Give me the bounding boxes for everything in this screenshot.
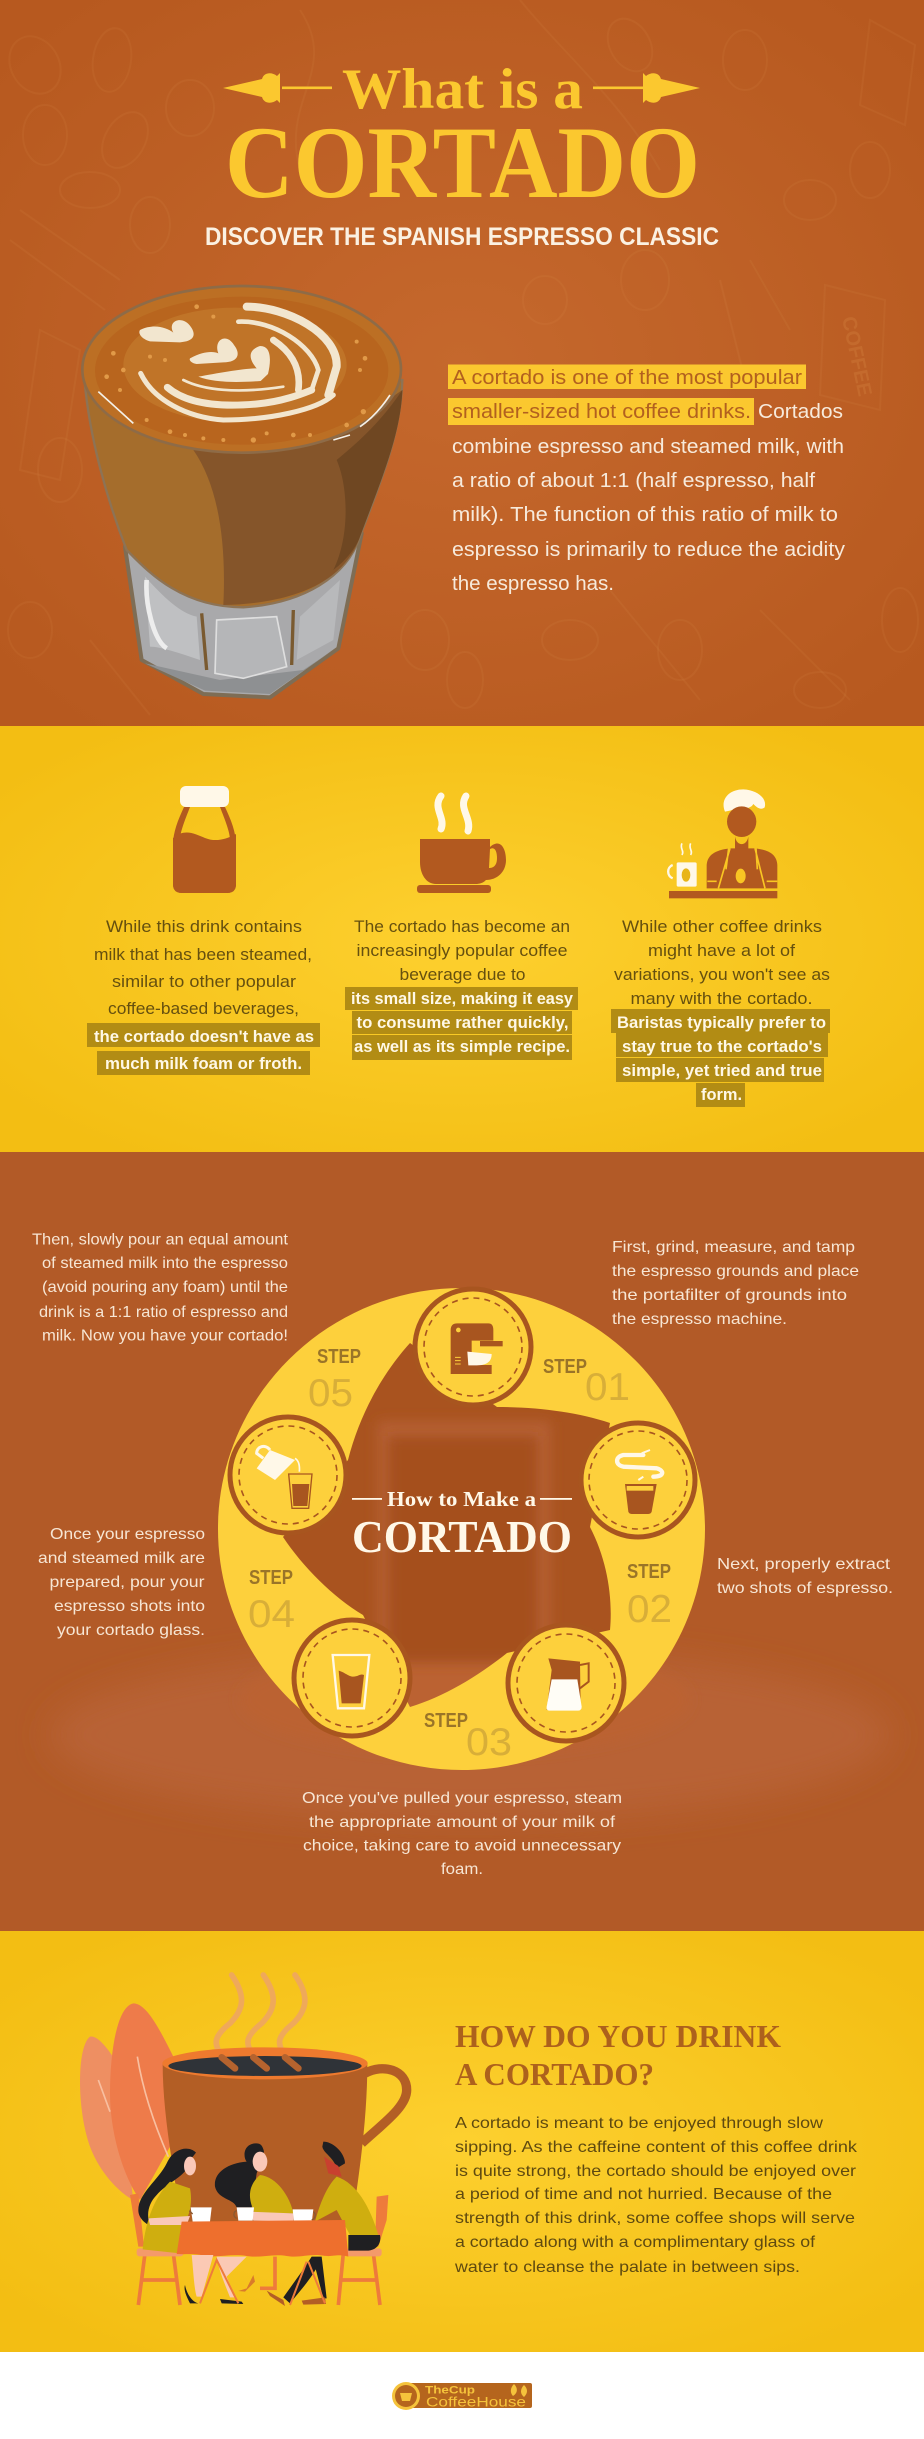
text: step 3: choice, taking care to avoid unnecessary <box>303 1838 621 1854</box>
text: column 1: coffee-based beverages, <box>108 999 299 1018</box>
blurred photo backdrop <box>50 1305 890 1820</box>
heading <box>455 2018 781 2092</box>
step labels: STEP <box>543 1356 587 1378</box>
body text: A cortado is meant to be enjoyed through slow <box>455 2115 823 2132</box>
text: step 5: of steamed milk into the espresso <box>42 1255 288 1272</box>
step labels <box>248 1346 672 1764</box>
panel: how to make <box>0 1152 924 1931</box>
panel: how do you drink <box>0 1931 924 2352</box>
intro text: A cortado is one of the most popular <box>452 367 802 389</box>
step labels: 03 <box>466 1721 512 1764</box>
text: column 2: beverage due to <box>400 965 526 984</box>
text: step 3: the appropriate amount of your milk of <box>309 1814 616 1831</box>
logo: CoffeeHouse <box>426 2394 526 2410</box>
left woman <box>138 2149 196 2253</box>
intro text: smaller-sized hot coffee drinks. <box>452 401 751 423</box>
text: step 2: Next, properly extract <box>717 1556 891 1573</box>
text: step 3 <box>302 1790 622 1878</box>
body text: strength of this drink, some coffee shops will serve <box>455 2210 855 2227</box>
text: column 3: While other coffee drinks <box>622 917 822 936</box>
node 5: pouring milk <box>230 1417 346 1533</box>
text: column 1: similar to other popular <box>112 972 296 991</box>
text: step 4: Once your espresso <box>50 1526 205 1543</box>
body text: a period of time and not hurried. Because of the <box>455 2186 832 2203</box>
step labels: STEP <box>249 1567 293 1589</box>
text: step 5: drink is a 1:1 ratio of espresso and <box>39 1304 288 1321</box>
subtitle: DISCOVER THE SPANISH ESPRESSO CLASSIC <box>205 223 719 251</box>
illustration: cortado glass <box>82 286 402 697</box>
wheel: five-step ring <box>218 1288 705 1770</box>
intro text: milk). The function of this ratio of milk to <box>452 504 838 526</box>
footer panel <box>0 2352 924 2439</box>
text: step 4: espresso shots into <box>54 1598 205 1615</box>
body text <box>454 2115 858 2276</box>
step labels: 02 <box>627 1588 672 1631</box>
logo: TheCup <box>425 2384 475 2396</box>
text: column 3 <box>611 917 830 1107</box>
text: step 4 <box>38 1526 205 1639</box>
text: column 2: as well as its simple recipe. <box>354 1037 570 1056</box>
panel: intro <box>0 0 924 726</box>
text: column 3: form. <box>701 1085 742 1104</box>
text: step 2 <box>717 1556 893 1597</box>
text: column 1: the cortado doesn't have as <box>94 1027 314 1046</box>
step labels: STEP <box>424 1710 468 1732</box>
text: step 5: (avoid pouring any foam) until the <box>42 1279 288 1296</box>
text: column 2: The cortado has become an <box>354 917 570 936</box>
wheel heading: How to Make a <box>387 1487 537 1511</box>
node 4: cortado glass <box>294 1620 410 1736</box>
title ornament: right <box>593 73 700 103</box>
title: What is a: What is a <box>342 58 583 121</box>
text: column 2: its small size, making it easy <box>351 989 574 1008</box>
text: step 3: foam. <box>441 1861 483 1878</box>
text: column 2 <box>345 917 578 1060</box>
text: column 3: Baristas typically prefer to <box>617 1013 826 1032</box>
text: column 2: increasingly popular coffee <box>356 941 568 960</box>
text: step 1 <box>612 1239 859 1328</box>
wheel heading: CORTADO <box>352 1511 572 1562</box>
node 1: espresso machine <box>415 1289 531 1405</box>
intro text: Cortados <box>758 401 843 423</box>
text: column 3: variations, you won't see as <box>614 965 830 984</box>
middle woman <box>215 2143 293 2222</box>
text: step 3: Once you've pulled your espresso, steam <box>302 1790 622 1807</box>
man <box>315 2142 380 2251</box>
intro text: the espresso has. <box>452 573 614 595</box>
illustration: friends at giant cup <box>80 1975 407 2306</box>
text: step 2: two shots of espresso. <box>717 1580 893 1597</box>
text: step 5: milk. Now you have your cortado! <box>42 1328 288 1344</box>
title ornament: left <box>223 73 332 103</box>
panel: why a cortado <box>0 726 924 1152</box>
intro text: combine espresso and steamed milk, with <box>452 436 844 458</box>
step labels: 04 <box>248 1593 295 1636</box>
intro text <box>448 364 845 595</box>
text: column 1: While this drink contains <box>106 917 302 936</box>
icon: milk bottle <box>173 786 236 893</box>
icon: steaming cup <box>417 796 506 893</box>
step labels: STEP <box>627 1561 671 1583</box>
text: column 3: might have a lot of <box>648 941 795 960</box>
coffee doodle background <box>0 0 918 715</box>
text: column 3: many with the cortado. <box>630 989 812 1008</box>
node 3: milk jug <box>508 1625 624 1741</box>
body text: sipping. As the caffeine content of this coffee drink <box>455 2139 858 2156</box>
intro text: espresso is primarily to reduce the acidity <box>452 539 845 561</box>
text: column 1: much milk foam or froth. <box>105 1054 302 1073</box>
step labels: 05 <box>308 1372 353 1415</box>
text: step 4: your cortado glass. <box>57 1622 205 1639</box>
text: column 2: to consume rather quickly, <box>356 1013 568 1032</box>
text: step 1: the espresso machine. <box>612 1311 787 1328</box>
heading: HOW DO YOU DRINK <box>455 2018 781 2054</box>
highlight: key sentence <box>448 364 806 425</box>
text: column 3: simple, yet tried and true <box>622 1061 822 1080</box>
text: step 1: the portafilter of grounds into <box>612 1287 847 1304</box>
text: column 3: stay true to the cortado's <box>622 1037 822 1056</box>
text: step 5 <box>32 1232 289 1344</box>
text: column 1: milk that has been steamed, <box>94 945 312 964</box>
step labels: STEP <box>317 1346 361 1368</box>
intro text: a ratio of about 1:1 (half espresso, half <box>452 470 815 492</box>
heading: A CORTADO? <box>455 2056 654 2092</box>
body text: water to cleanse the palate in between sips. <box>454 2259 800 2276</box>
text: column 1 <box>87 917 320 1075</box>
title: CORTADO: CORTADO <box>225 106 700 220</box>
text: step 4: prepared, pour your <box>50 1574 205 1591</box>
text: step 1: First, grind, measure, and tamp <box>612 1239 855 1256</box>
text: step 5: Then, slowly pour an equal amount <box>32 1232 289 1248</box>
step labels: 01 <box>585 1366 630 1409</box>
text: step 1: the espresso grounds and place <box>612 1263 859 1280</box>
logo <box>392 2382 532 2410</box>
body text: is quite strong, the cortado should be enjoyed over <box>455 2163 857 2180</box>
body text: a cortado along with a complimentary glass of <box>455 2234 816 2251</box>
node 2: espresso shot with steam <box>581 1423 695 1537</box>
icon: barista <box>668 789 777 898</box>
text: step 4: and steamed milk are <box>38 1550 205 1567</box>
wheel heading <box>352 1487 572 1562</box>
panel: intro: COFFEE <box>837 314 875 398</box>
